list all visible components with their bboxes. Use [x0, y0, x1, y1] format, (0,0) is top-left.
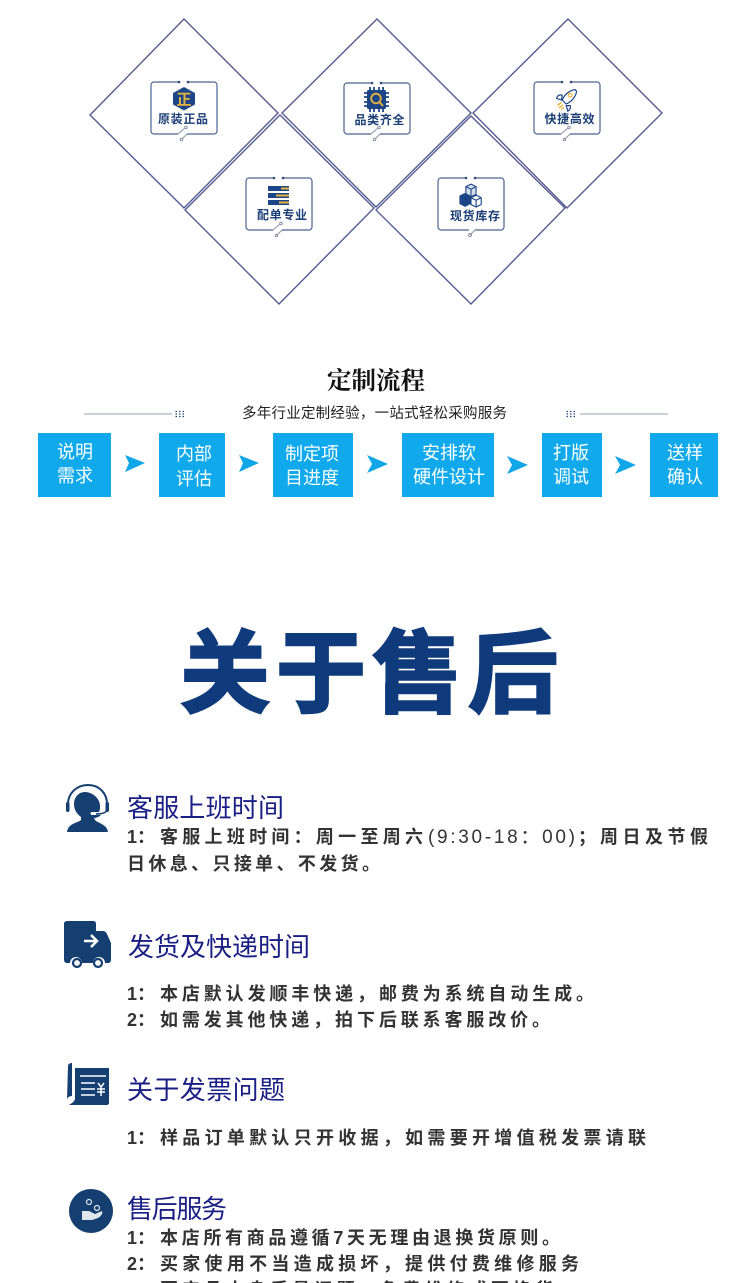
icon: hand with coins [69, 1189, 113, 1233]
body text: 2： [127, 1010, 155, 1030]
process step: 送样确认 [650, 433, 718, 497]
body text: 本店默认发顺丰快递，邮费为系统自动生成。 [160, 983, 594, 1004]
icon frame: 配单专业: 配单专业 [257, 207, 307, 222]
icon frame: 现货库存: 现货库存 [450, 208, 500, 223]
process step: 安排软硬件设计: 硬件设计 [413, 467, 485, 487]
arrow 2 [239, 455, 259, 472]
process step: 安排软硬件设计: 安排软 [422, 443, 476, 463]
arrow 4 [507, 456, 528, 474]
body text: 日休息、只接单、不发货。 [127, 853, 380, 874]
icon frame: 品类齐全: 品类齐全 [354, 112, 404, 127]
icon: invoice scroll [67, 1063, 109, 1105]
body text: ； [578, 827, 596, 847]
body text: 客服上班时间：周一至周六 [160, 826, 423, 847]
process step: 内部评估 [159, 433, 225, 497]
process step: 打版调试 [542, 433, 602, 497]
decoration: left rule with dots [84, 412, 184, 416]
body text: 1： [127, 1128, 155, 1148]
decoration: right rule with dots [566, 412, 668, 416]
body text: (9:30-18：00) [428, 827, 575, 848]
body text: 本店所有商品遵循7天无理由退换货原则。 [160, 1227, 560, 1248]
process step: 打版调试: 调试 [553, 467, 589, 487]
process step: 安排软硬件设计 [402, 433, 494, 497]
icon: delivery truck [64, 921, 111, 967]
heading: 售后服务 [127, 1194, 227, 1224]
heading: 定制流程: 定制流程 [327, 367, 426, 395]
heading: 客服上班时间 [127, 793, 284, 823]
subtitle: 多年行业定制经验，一站式轻松采购服务 [242, 405, 507, 422]
body text: 如需发其他快递，拍下后联系客服改价。 [160, 1009, 550, 1030]
icon: headset agent [66, 785, 109, 832]
body text: 2： [127, 1254, 155, 1274]
arrow 3 [367, 455, 388, 473]
icon frame: 现货库存 [438, 177, 504, 236]
process step: 说明需求: 需求 [57, 466, 93, 486]
body text: 周日及节假 [600, 827, 708, 847]
arrow 5 [615, 456, 636, 474]
process step: 制定项目进度 [273, 433, 353, 497]
diamond: 原装正品 [90, 19, 278, 208]
panel: advantages diamonds [90, 19, 662, 304]
process step: 制定项目进度: 目进度 [285, 468, 339, 488]
body text: 1： [127, 827, 155, 847]
process step: 打版调试: 打版 [553, 443, 589, 463]
body text [127, 826, 708, 874]
icon frame: 原装正品: 正 [176, 92, 192, 108]
section: shipping times [64, 921, 594, 1030]
icon frame: 品类齐全 [344, 82, 410, 141]
body text: 样品订单默认只开收据，如需要开增值税发票请联 [160, 1127, 646, 1148]
icon frame: 快捷高效: 快捷高效 [544, 111, 594, 126]
icon frame: 快捷高效 [534, 81, 600, 141]
heading: 发货及快递时间 [128, 932, 310, 962]
icon frame: 原装正品 [151, 81, 217, 141]
body text [127, 983, 594, 1030]
icon frame: 原装正品: 原装正品 [158, 111, 208, 126]
process step: 制定项目进度: 制定项 [285, 444, 339, 464]
main title: 关于售后: 关于售后 [180, 601, 558, 731]
diamond: 配单专业 [185, 115, 374, 304]
process step: 内部评估: 内部 [176, 444, 212, 464]
process step: 送样确认: 送样 [667, 443, 703, 463]
body text: 1： [127, 1228, 155, 1248]
diamond: 快捷高效 [473, 19, 662, 208]
body text [127, 1227, 579, 1283]
section: customer service hours [66, 785, 708, 874]
section: after-sales service [69, 1189, 579, 1283]
section: invoices [67, 1063, 646, 1148]
diamond: 品类齐全 [282, 19, 471, 207]
icon frame: 配单专业 [246, 177, 312, 237]
diamond: 现货库存 [376, 116, 565, 304]
process step: 说明需求 [38, 433, 111, 497]
body text: 买家使用不当造成损坏，提供付费维修服务 [160, 1253, 579, 1274]
body text: 1： [127, 984, 155, 1004]
arrow 1 [125, 455, 145, 472]
process step: 送样确认: 确认 [667, 467, 703, 487]
process step: 说明需求: 说明 [57, 442, 93, 462]
heading: 关于发票问题 [127, 1075, 285, 1105]
process step: 内部评估: 评估 [176, 469, 212, 489]
